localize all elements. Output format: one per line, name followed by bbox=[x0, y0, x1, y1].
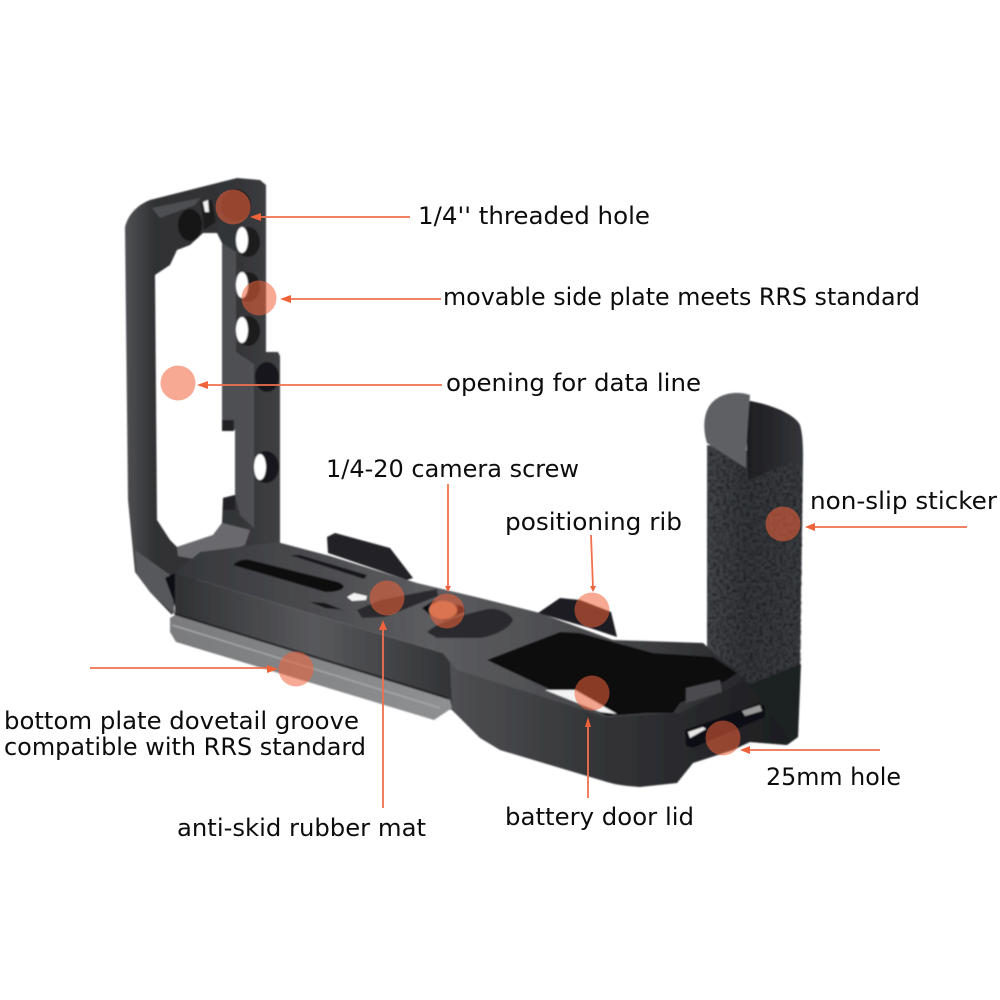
callout: 1/4 threaded hole: 1/4'' threaded hole bbox=[418, 202, 650, 230]
base plate left front face bbox=[175, 573, 452, 710]
callout: positioning rib bbox=[505, 508, 682, 628]
vertical side plate frame bbox=[125, 178, 280, 615]
callout: non-slip sticker bbox=[766, 487, 997, 542]
plate slots and locating tab bbox=[233, 533, 413, 610]
grip bbox=[704, 393, 803, 745]
callout: camera screw: 1/4-20 camera screw bbox=[326, 455, 579, 483]
callout: dovetail groove: bottom plate dovetail groove bbox=[4, 707, 359, 735]
callout: camera screw bbox=[326, 455, 579, 628]
callout: movable side plate: movable side plate meets RRS standard bbox=[443, 283, 920, 311]
callout: non-slip sticker: non-slip sticker bbox=[810, 487, 997, 515]
dovetail rail bbox=[170, 614, 452, 720]
callout: 25mm hole: 25mm hole bbox=[766, 763, 901, 791]
callout: battery door lid: battery door lid bbox=[505, 803, 694, 831]
positioning rib bbox=[538, 598, 617, 637]
callout: movable side plate bbox=[242, 280, 920, 316]
callout: anti-skid rubber mat: anti-skid rubber mat bbox=[177, 814, 426, 842]
battery opening bbox=[487, 632, 737, 716]
base plate right front body bbox=[443, 653, 790, 787]
callout: opening for data line bbox=[160, 366, 701, 400]
callout: 25mm hole bbox=[706, 720, 901, 791]
callout: dovetail groove bbox=[4, 652, 366, 761]
callout: anti-skid rubber mat bbox=[177, 580, 426, 842]
callout: battery door lid bbox=[505, 676, 694, 831]
25mm slot bbox=[685, 703, 765, 748]
callout: opening for data line: opening for data line bbox=[446, 369, 701, 397]
callout: 1/4 threaded hole bbox=[216, 190, 650, 230]
callout: positioning rib: positioning rib bbox=[505, 508, 682, 536]
base plate top surface bbox=[175, 542, 745, 717]
side plate holes bbox=[221, 189, 279, 510]
rubber mat and screw bbox=[347, 589, 513, 638]
callout: dovetail groove: compatible with RRS standard bbox=[4, 733, 366, 761]
product photo: L-bracket bbox=[125, 178, 803, 787]
